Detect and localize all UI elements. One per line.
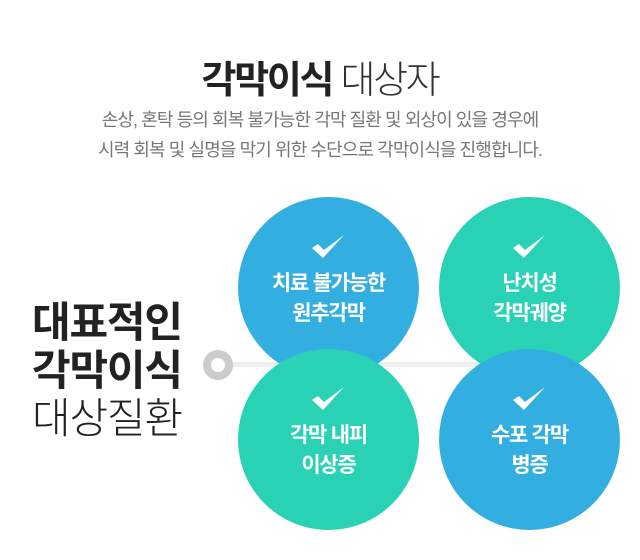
connector line	[228, 362, 488, 367]
connector ring	[203, 350, 233, 380]
label	[491, 424, 569, 477]
label: 각막궤양	[493, 302, 566, 325]
circle: 각막 내피 이상증	[238, 349, 419, 530]
circle: 수포 각막 병증	[439, 349, 620, 530]
label	[272, 272, 386, 325]
label: 병증	[511, 454, 548, 477]
label	[493, 272, 566, 325]
side heading: 각막이식	[32, 347, 182, 394]
label: 원추각막	[292, 302, 365, 325]
side heading: 대표적인	[32, 299, 182, 346]
circle: 난치성 각막궤양	[439, 197, 620, 378]
icon: check	[513, 387, 545, 410]
icon: check	[312, 235, 344, 258]
side heading	[32, 299, 182, 442]
side heading: 대상질환	[32, 395, 182, 442]
label: 치료 불가능한	[272, 272, 385, 295]
label: 난치성	[502, 272, 557, 295]
circle: 치료 불가능한 원추각막	[238, 197, 419, 378]
description text: 시력 회복 및 실명을 막기 위한 수단으로 각막이식을 진행합니다.	[98, 140, 542, 160]
label	[290, 424, 367, 477]
label: 수포 각막	[491, 424, 568, 447]
icon: check	[513, 235, 545, 258]
label: 각막 내피	[290, 424, 367, 447]
icon: check	[312, 387, 344, 410]
description text: 손상, 혼탁 등의 회복 불가능한 각막 질환 및 외상이 있을 경우에	[102, 110, 538, 130]
label: 이상증	[301, 454, 356, 477]
description text	[98, 110, 542, 160]
title: 각막이식 대상자	[202, 60, 438, 102]
